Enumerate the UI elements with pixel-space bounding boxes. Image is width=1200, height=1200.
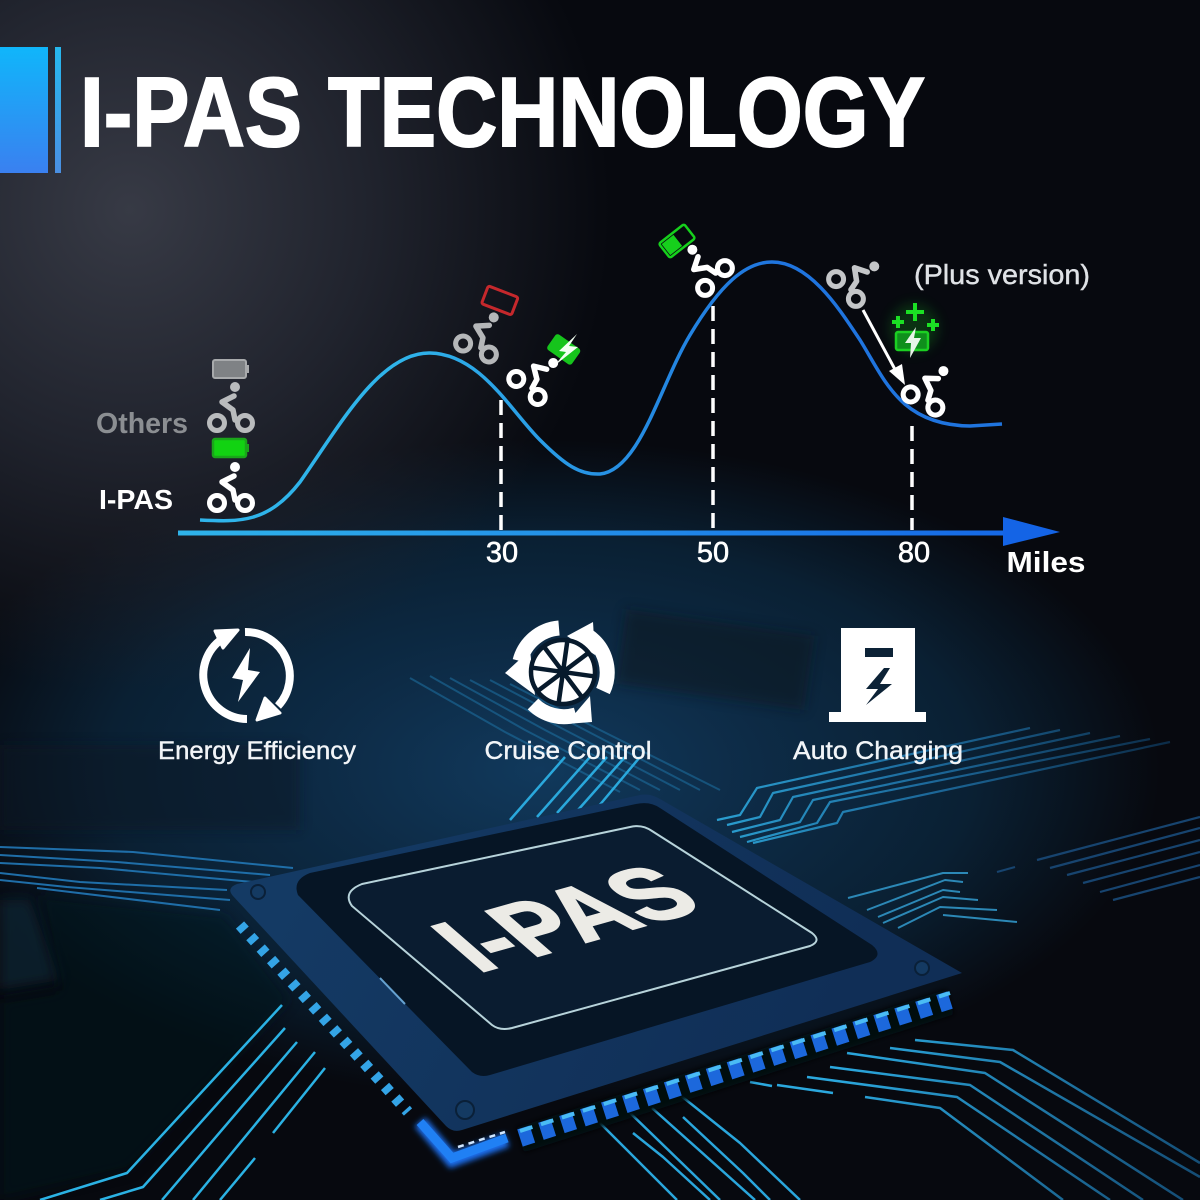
icon: charging rider after 30 miles <box>506 333 581 408</box>
icon: grey rider on descent <box>825 245 890 310</box>
icon: I-PAS battery and rider <box>210 439 252 510</box>
chip body <box>230 794 962 1131</box>
icon: cruise control <box>505 622 607 724</box>
icon: empty battery rider at 30 miles <box>453 286 518 364</box>
miles axis <box>178 517 1060 546</box>
axis tick 50: 50 <box>697 537 729 569</box>
chip label outline <box>349 826 817 1029</box>
title: TECHNOLOGY <box>328 57 925 167</box>
label: energy efficiency: Energy Efficiency <box>158 737 356 765</box>
chart: range curve <box>178 262 1086 579</box>
icon: rider after 80 miles <box>900 355 961 418</box>
chip: I-PAS processor <box>230 794 962 1160</box>
arrow: descent regeneration <box>863 310 905 385</box>
chip top <box>296 803 878 1076</box>
chip text: I-PAS <box>411 850 723 987</box>
chip screws <box>251 885 929 1119</box>
chip edge highlight <box>380 978 405 1004</box>
title accent bar <box>0 47 61 173</box>
icon: auto charging <box>829 628 926 722</box>
icon: energy efficiency <box>203 630 290 720</box>
title: I-PAS <box>80 57 302 167</box>
circuit traces <box>0 676 1200 1200</box>
title <box>80 57 925 167</box>
label: others: Others <box>96 408 188 440</box>
dashed distance markers <box>501 306 912 530</box>
label: I-PAS: I-PAS <box>99 484 173 515</box>
chip pins <box>240 925 950 1160</box>
range curve line <box>200 262 1002 521</box>
axis label: Miles <box>1006 547 1086 579</box>
icon: half battery rider at 50 miles <box>659 224 736 299</box>
icon: regenerating battery <box>890 303 939 358</box>
axis tick 30: 30 <box>486 537 518 569</box>
label: auto charging: Auto Charging <box>793 737 963 765</box>
label: plus version: (Plus version) <box>914 259 1090 290</box>
axis tick 80: 80 <box>898 537 930 569</box>
icon: others battery and rider <box>210 360 252 430</box>
label: cruise control: Cruise Control <box>484 737 652 765</box>
